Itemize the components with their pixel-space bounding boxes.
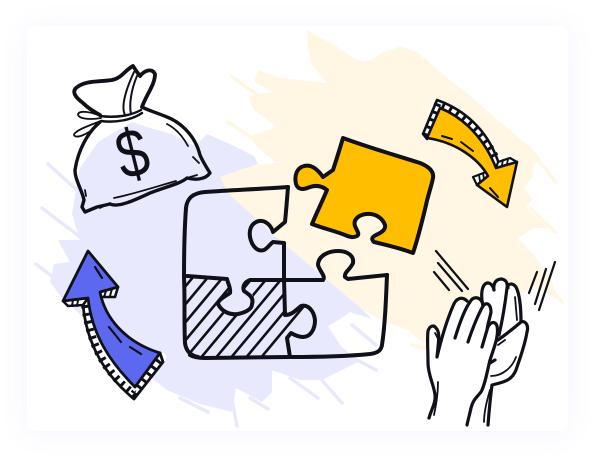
outer right and bottom edge: [190, 275, 387, 358]
brush wisps: cream: [226, 77, 562, 352]
brush stroke: cream: [220, 30, 556, 343]
blue arrow head side ticks: [72, 289, 112, 306]
puzzle board: [182, 185, 389, 360]
bag highlights: [85, 124, 199, 208]
yellow arrow head side ticks: [479, 159, 508, 181]
dollar sign: $: [108, 113, 157, 195]
blue arrow dashes: [95, 267, 141, 354]
blue arrow side strip: [85, 305, 162, 394]
yellow arrow: [423, 100, 517, 207]
brush wisps: lavender: [36, 164, 376, 426]
motion lines right: [529, 262, 555, 310]
brush stroke: lavender: [50, 122, 372, 412]
front hand: [428, 298, 498, 425]
money bag icon: [74, 66, 210, 212]
bag top frill: [74, 66, 155, 115]
hatching on lower left piece: [186, 278, 304, 356]
blue arrow outer edge: [83, 305, 163, 399]
blue arrow head sides: [63, 287, 118, 306]
yellow puzzle piece: [295, 138, 433, 253]
hands white silhouette: [428, 279, 527, 425]
yellow arrow side strip: [425, 103, 497, 160]
blue arrow: [63, 251, 163, 399]
blue arrow side ticks: [85, 305, 162, 394]
bag neck band: [100, 110, 142, 122]
illustration: [34, 30, 564, 428]
yellow arrow front: [427, 108, 517, 207]
bag folds: [123, 72, 137, 115]
yellow arrow outer edge: [423, 100, 498, 161]
yellow arrow dashes: [442, 136, 498, 197]
hand detail lines: [434, 297, 517, 422]
yellow arrow side ticks: [425, 103, 497, 160]
motion lines left: [434, 251, 468, 291]
horizontal inner edge with notch: [187, 251, 387, 314]
clapping hands: [428, 279, 528, 425]
yellow arrow head sides: [473, 158, 517, 185]
bag ties: [74, 112, 101, 136]
blue arrow front: [63, 251, 160, 387]
upper left piece outline: [184, 187, 288, 357]
back hand: [482, 279, 528, 425]
inner vertical edge: [250, 187, 315, 357]
bag body: [75, 107, 210, 212]
card background: [27, 26, 568, 431]
